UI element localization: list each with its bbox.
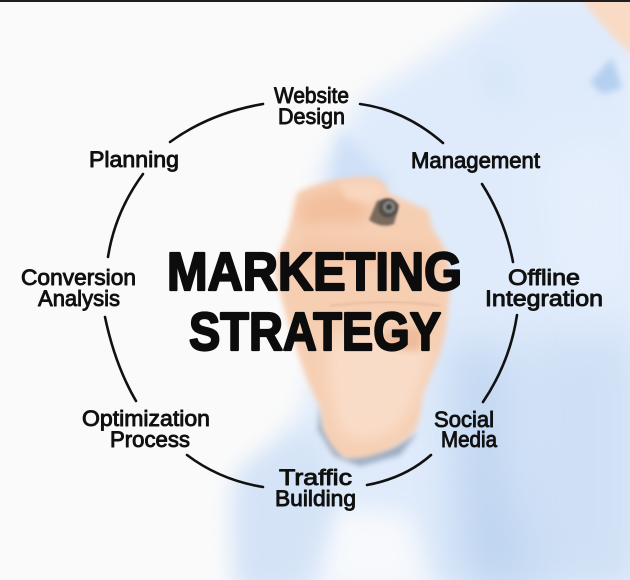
hand shading (285, 181, 440, 440)
label: traffic building: Building (275, 486, 356, 511)
label: management: Management (411, 148, 540, 173)
skin at top right (578, 0, 630, 62)
label: website design: Design (278, 104, 345, 129)
label: traffic building: Traffic (279, 465, 352, 490)
hand (276, 177, 450, 458)
title: marketing strategy: MARKETING (167, 242, 462, 302)
title: marketing strategy (167, 242, 462, 362)
label: optimization process: Optimization (82, 406, 210, 431)
label: social media: Media (441, 427, 498, 452)
label: offline integration: Integration (485, 286, 603, 311)
label: conversion analysis: Analysis (38, 286, 120, 311)
label: conversion analysis (21, 265, 136, 311)
label: offline integration (485, 265, 603, 311)
top dark bar (0, 0, 630, 2)
label: website design (274, 83, 349, 129)
icon: marker pen (369, 198, 399, 226)
label: traffic building (275, 465, 356, 511)
circular arrows ring (105, 104, 517, 487)
blurred shirt (232, 0, 630, 580)
shirt cuff (318, 404, 418, 466)
label: social media (434, 407, 498, 452)
label: website design: Website (274, 83, 349, 108)
label: planning: Planning (89, 147, 179, 172)
label: conversion analysis: Conversion (21, 265, 136, 290)
label: optimization process (82, 406, 210, 452)
label: social media: Social (434, 407, 494, 432)
title: marketing strategy: STRATEGY (189, 302, 441, 362)
label: offline integration: Offline (508, 265, 580, 290)
label: optimization process: Process (110, 427, 190, 452)
